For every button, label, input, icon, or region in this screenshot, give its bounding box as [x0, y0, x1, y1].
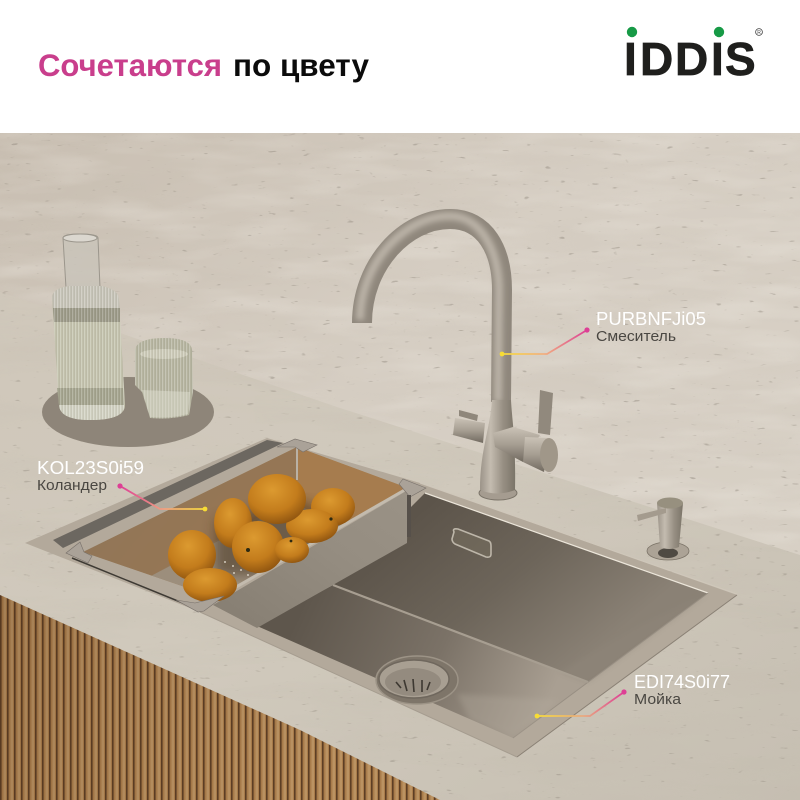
leader line [117, 483, 207, 511]
callout: sink [535, 672, 730, 718]
cross bar [493, 427, 540, 462]
right handle lever [538, 390, 553, 435]
title: Сочетаются [38, 47, 222, 83]
leader line [535, 689, 627, 718]
leader line [500, 327, 590, 356]
logo: IDDIS: IDDIS [624, 33, 756, 85]
colander clips [66, 439, 426, 612]
carafe and glass on a round mat [42, 234, 214, 447]
oranges [168, 474, 355, 602]
sink top plate [25, 438, 737, 757]
right handle knob [523, 437, 558, 472]
sink bowl [257, 493, 708, 738]
colander [66, 439, 426, 628]
sink drain [376, 656, 458, 704]
soap dispenser [637, 498, 689, 560]
callout: colander [37, 458, 207, 511]
wood slat cabinet front [0, 595, 440, 800]
round mat [42, 377, 214, 447]
faucet base [479, 486, 517, 500]
colander slot [53, 440, 283, 548]
product name: Коландер [37, 477, 107, 494]
model code: PURBNFJi05 [596, 309, 706, 329]
sink overflow [452, 529, 491, 557]
title [38, 47, 369, 83]
faucet spout [360, 216, 502, 402]
callout: faucet [500, 309, 706, 356]
logo: IDDIS: R [757, 30, 761, 36]
left handle [453, 410, 485, 443]
faucet [360, 216, 558, 500]
colander interior [83, 447, 408, 598]
title: по цвету [233, 47, 369, 83]
ribbed glass [135, 338, 193, 419]
stone countertop [0, 290, 800, 800]
faucet body [480, 400, 515, 494]
colander outer face [213, 490, 408, 628]
product name: Смеситель [596, 328, 676, 345]
product name: Мойка [634, 691, 682, 708]
model code: EDI74S0i77 [634, 672, 730, 692]
carafe [52, 234, 125, 420]
model code: KOL23S0i59 [37, 458, 144, 478]
